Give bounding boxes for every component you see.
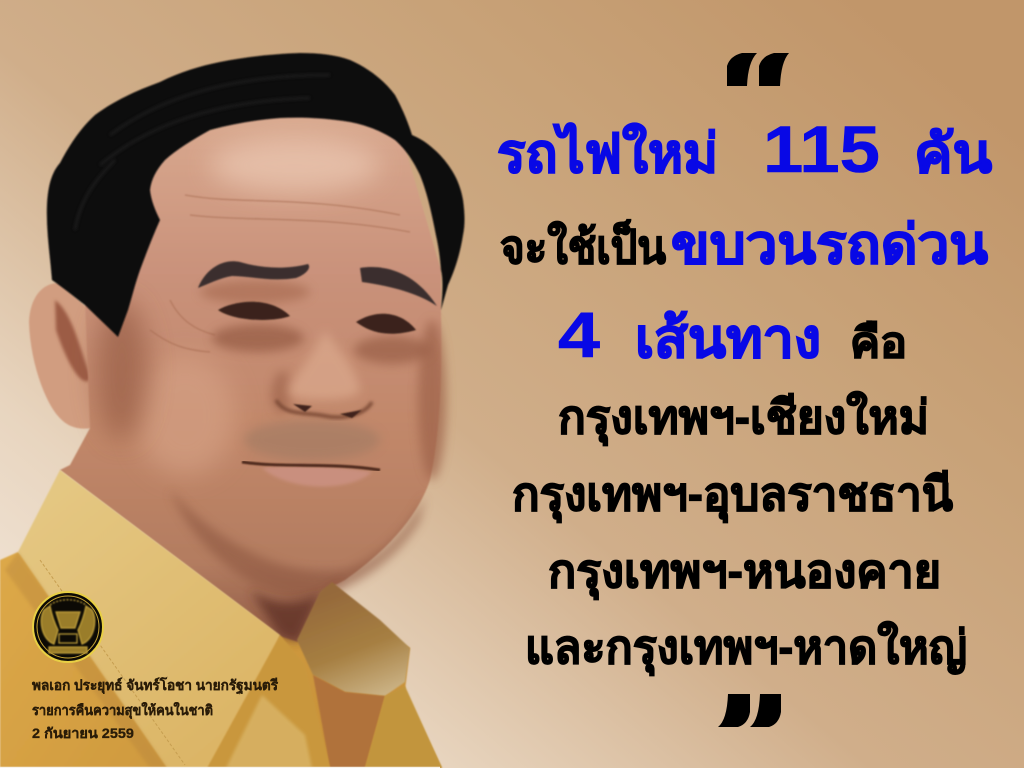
white edge line — [0, 766, 440, 768]
lower lip — [262, 466, 372, 487]
jaw crease shadow — [170, 490, 425, 600]
caption line 3: 2 กันยายน 2559 — [32, 725, 134, 741]
ear — [29, 283, 100, 429]
line 3 routes: เส้นทาง — [635, 309, 821, 369]
neck shadow — [250, 578, 345, 642]
line 1 number: 115 — [763, 112, 880, 186]
line 1 unit: คัน — [914, 124, 992, 184]
front placket — [207, 635, 330, 768]
nose highlight — [287, 330, 360, 400]
right eyebrow — [360, 267, 437, 306]
inner ear shadow — [55, 300, 92, 381]
caption line 1: พลเอก ประยุทธ์ จันทร์โอชา นายกรัฐมนตรี — [32, 676, 278, 695]
nostrils — [293, 404, 362, 418]
forehead highlight — [210, 137, 380, 193]
nose base — [276, 400, 372, 417]
opening quote mark — [727, 53, 789, 86]
cheek highlight — [135, 355, 235, 475]
collar shadow — [5, 552, 167, 768]
seal artwork — [41, 600, 95, 653]
line 4: กรุงเทพฯ-เชียงใหม่ — [558, 390, 929, 446]
line 3 number: 4 — [558, 299, 600, 371]
right cheek shadow — [418, 320, 446, 480]
line 2: จะใช้เป็น — [500, 219, 666, 273]
line 1 train: รถไฟใหม่ — [497, 122, 718, 184]
face and neck — [60, 100, 441, 642]
left eye — [218, 302, 290, 320]
caption — [32, 676, 278, 741]
left eyebrow — [198, 261, 309, 288]
line 3 end: คือ — [850, 319, 907, 366]
inner right collar — [297, 582, 410, 696]
government seal — [33, 592, 103, 662]
right eye — [356, 314, 416, 334]
eye bag shadow right — [354, 336, 430, 364]
collar stitching — [40, 560, 185, 765]
nose side shadow — [271, 372, 292, 414]
placket highlight — [226, 695, 312, 768]
shirt chest copper panel — [313, 675, 385, 768]
portrait — [0, 53, 464, 768]
hair highlights — [75, 75, 330, 230]
eye bag shadow left — [212, 324, 304, 352]
right shirt panel — [365, 686, 442, 768]
line 5: กรุงเทพฯ-อุบลราชธานี — [512, 468, 954, 523]
forehead wrinkles — [150, 195, 410, 352]
line 2 highlight: ขบวนรถด่วน — [671, 215, 988, 275]
temple shadow — [96, 300, 148, 440]
mouth line — [242, 462, 380, 470]
brow and eye socket shadow — [200, 280, 310, 304]
hair — [47, 53, 465, 337]
caption line 2: รายการคืนความสุขให้คนในชาติ — [32, 701, 213, 719]
line 6: กรุงเทพฯ-หนองคาย — [548, 545, 941, 600]
left collar — [18, 470, 280, 768]
closing quote mark — [718, 694, 781, 727]
headline quote — [497, 112, 992, 676]
stubble area — [244, 420, 380, 460]
seal inner ring — [37, 596, 99, 658]
seal disc — [33, 592, 103, 662]
line 7: และกรุงเทพฯ-หาดใหญ่ — [525, 620, 967, 676]
shirt body — [0, 552, 442, 768]
